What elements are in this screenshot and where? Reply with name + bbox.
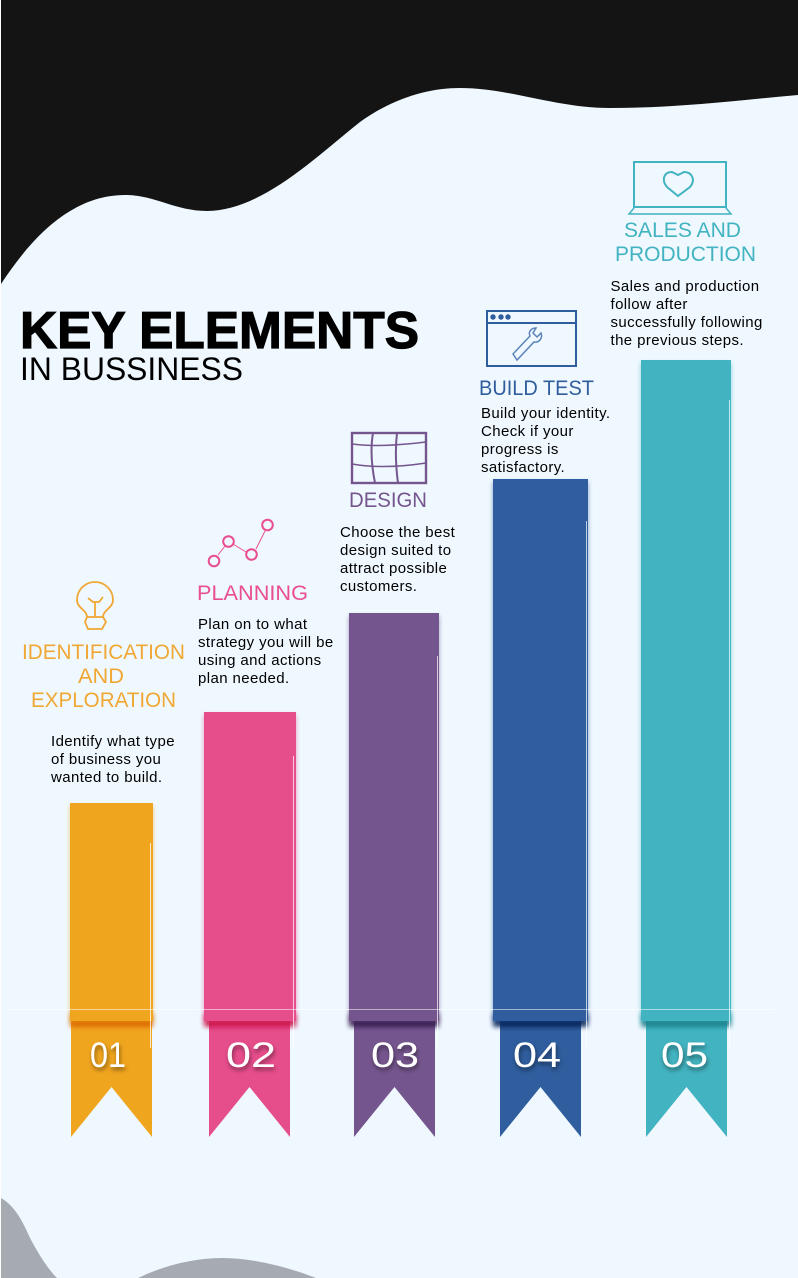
description: progress is bbox=[481, 441, 559, 458]
ribbon bbox=[493, 1014, 588, 1137]
icon: browser window with wrench bbox=[487, 311, 576, 366]
heading: SALES AND bbox=[624, 219, 741, 242]
top black wave shape bbox=[1, 0, 798, 284]
description bbox=[198, 616, 334, 687]
description: Identify what type bbox=[51, 733, 175, 750]
heading: EXPLORATION bbox=[31, 689, 176, 712]
icon: line chart bbox=[209, 520, 273, 566]
description: of business you bbox=[51, 751, 161, 768]
description bbox=[481, 405, 610, 476]
description: attract possible bbox=[340, 560, 447, 577]
heading bbox=[22, 641, 185, 712]
description: Sales and production bbox=[610, 278, 759, 295]
step 3: design bbox=[340, 433, 456, 1137]
icon: light bulb bbox=[77, 582, 113, 629]
description bbox=[50, 733, 175, 786]
icon: warped grid bbox=[352, 433, 426, 483]
number: 04 bbox=[513, 1036, 561, 1075]
description: satisfactory. bbox=[481, 459, 565, 476]
heading: AND bbox=[78, 665, 124, 688]
title: KEY ELEMENTS bbox=[20, 302, 419, 360]
ribbon bbox=[204, 1014, 296, 1137]
description: follow after bbox=[610, 296, 688, 313]
description: plan needed. bbox=[198, 670, 290, 687]
subtitle: IN BUSSINESS bbox=[20, 351, 243, 387]
heading: IDENTIFICATION bbox=[22, 641, 185, 664]
description bbox=[610, 278, 763, 349]
number: 02 bbox=[226, 1036, 276, 1075]
heading: PRODUCTION bbox=[615, 243, 756, 266]
description: customers. bbox=[340, 578, 417, 595]
title bbox=[20, 302, 419, 387]
ribbon bbox=[641, 1014, 731, 1137]
heading: BUILD TEST bbox=[479, 377, 594, 400]
step 2: planning bbox=[197, 520, 334, 1137]
description: design suited to bbox=[340, 542, 451, 559]
description: the previous steps. bbox=[610, 332, 744, 349]
description: Plan on to what bbox=[198, 616, 308, 633]
bar bbox=[70, 803, 153, 1048]
bottom centre grey shape bbox=[138, 1258, 316, 1278]
description: successfully following bbox=[610, 314, 763, 331]
step 4: build test bbox=[479, 311, 610, 1137]
description: Check if your bbox=[481, 423, 574, 440]
heading bbox=[615, 219, 756, 266]
description: wanted to build. bbox=[50, 769, 162, 786]
step 1: identification bbox=[22, 582, 185, 1137]
number: 01 bbox=[90, 1036, 126, 1075]
number: 03 bbox=[371, 1036, 419, 1075]
description bbox=[340, 524, 456, 595]
heading: PLANNING bbox=[197, 582, 308, 605]
ribbon bbox=[349, 1014, 439, 1137]
description: strategy you will be bbox=[198, 634, 334, 651]
bar bbox=[641, 360, 731, 1048]
ribbon bbox=[70, 1014, 153, 1137]
description: Choose the best bbox=[340, 524, 456, 541]
description: using and actions bbox=[198, 652, 322, 669]
bar bbox=[493, 479, 588, 1048]
step 5: sales and production bbox=[610, 162, 763, 1137]
heading: DESIGN bbox=[349, 489, 427, 512]
icon: laptop with heart bbox=[629, 162, 731, 214]
bar bbox=[349, 613, 439, 1048]
bar bbox=[204, 712, 296, 1048]
description: Build your identity. bbox=[481, 405, 610, 422]
bottom left grey shape bbox=[1, 1198, 57, 1278]
number: 05 bbox=[661, 1036, 708, 1075]
